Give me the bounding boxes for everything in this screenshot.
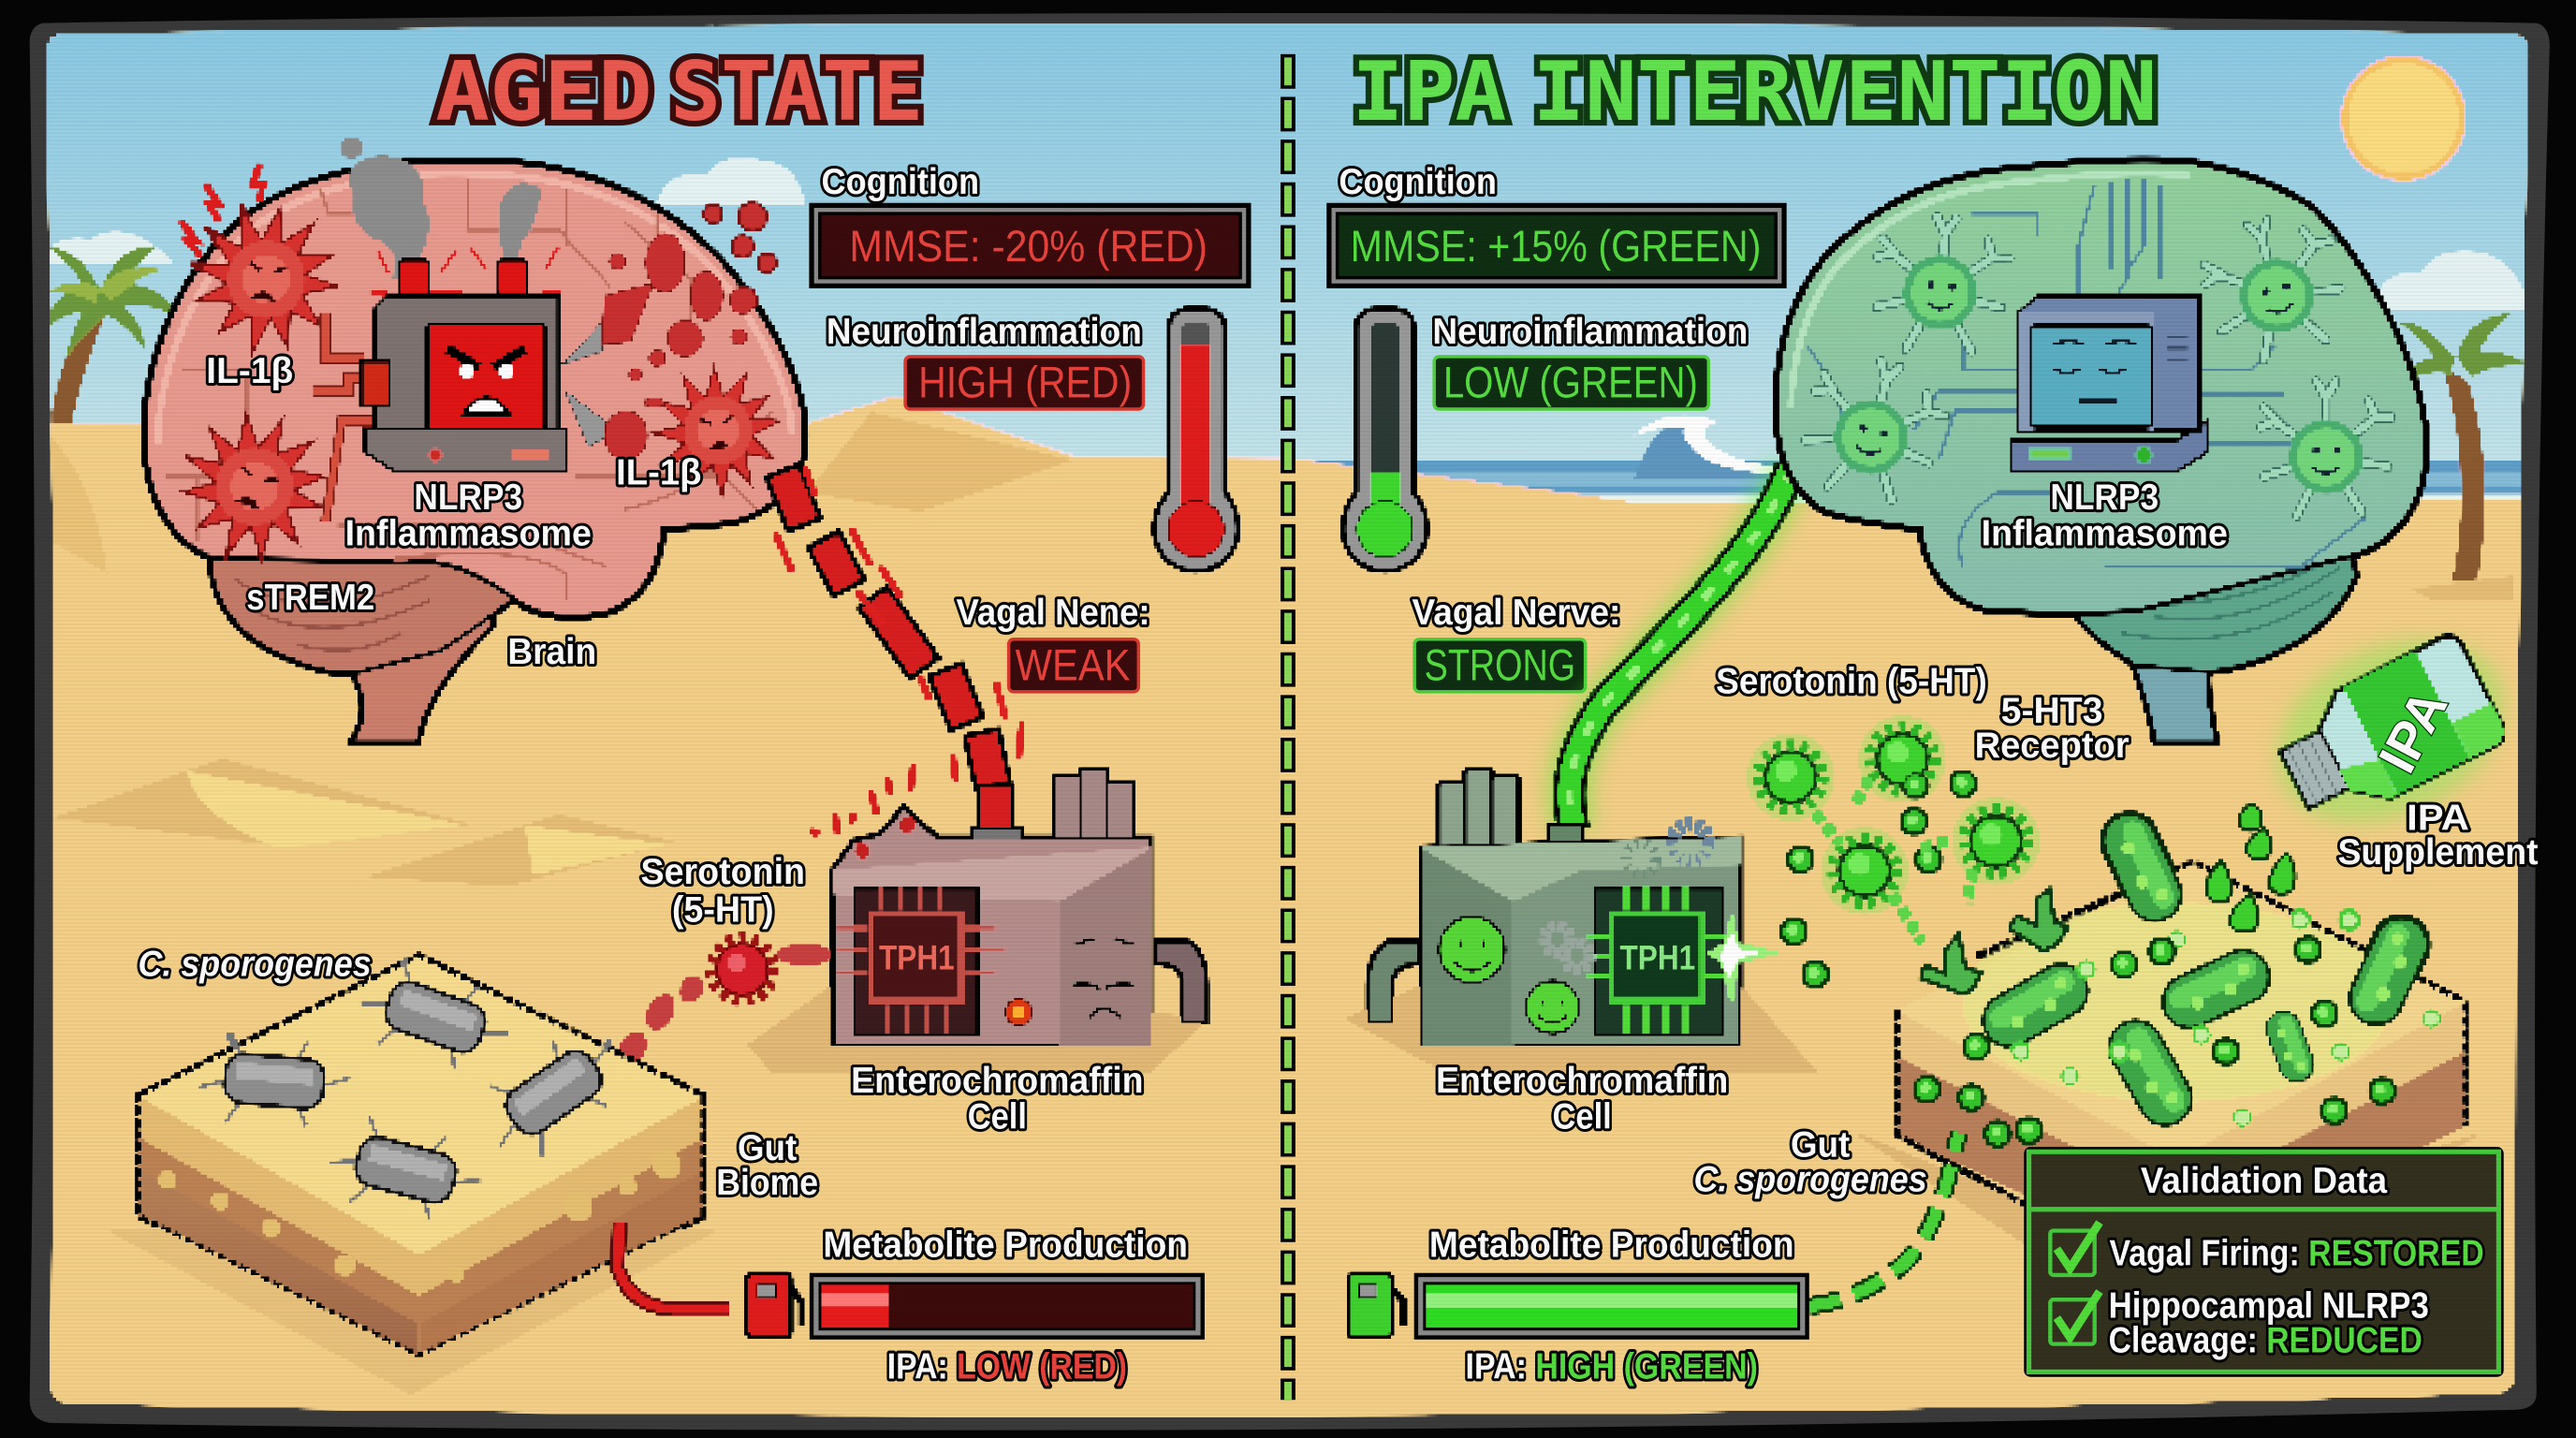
thermometer high: [1155, 309, 1237, 570]
cognition label left: Cognition: [822, 162, 979, 202]
weak red pipe: [618, 1224, 729, 1310]
brainstem: [348, 592, 493, 742]
inflamed cytokine right: [645, 360, 788, 504]
panel: healthy enterochromaffin factory: [1347, 769, 1815, 1071]
nlrp3 machine angry: [361, 259, 567, 472]
label: serotonin left: Serotonin: [641, 852, 805, 892]
title: aged state: STATE: [670, 44, 923, 139]
vagal nerve label: Vagal Nerve:: [1412, 593, 1620, 633]
title: aged state: AGED: [435, 44, 652, 139]
smoke: [342, 138, 542, 283]
label: strem2: sTREM2: [246, 578, 374, 618]
mmse readout green: MMSE: +15% (GREEN): [1351, 222, 1761, 271]
cognition label right: Cognition: [1339, 162, 1497, 202]
serotonin particles: [1748, 716, 2393, 1145]
inflamed cytokine upper: [181, 198, 348, 364]
label: brain: Brain: [507, 632, 596, 672]
label: nlrp3 right: NLRP3: [2050, 477, 2159, 518]
palm tree right: [2395, 312, 2533, 601]
label: enterochromaffin right: Enterochromaffin: [1436, 1061, 1728, 1101]
wires: [313, 312, 378, 522]
panel: healthy brain: [1776, 160, 2425, 742]
cleaving blades and fragments: [562, 204, 775, 460]
strong badge: STRONG: [1425, 641, 1575, 691]
icon: ipa bottle: IPA: [2367, 681, 2458, 782]
low badge: LOW (GREEN): [1443, 359, 1698, 408]
neuroinflammation label left: Neuroinflammation: [827, 312, 1142, 352]
brainstem right: [2126, 644, 2217, 742]
check: vagal firing: [2050, 1223, 2100, 1275]
label: inflammasome: Inflammasome: [345, 514, 592, 554]
cerebellum right: [2069, 542, 2356, 672]
brain artwork left: [144, 138, 805, 742]
label: gut right: Gut: [1791, 1125, 1850, 1166]
sun: [2341, 56, 2466, 181]
mmse readout green: [1329, 205, 1784, 286]
sand and dunes: [37, 396, 2530, 1438]
hippocampal nlrp3 line: Hippocampal NLRP3: [2109, 1286, 2429, 1327]
label: enterochromaffin left: Enterochromaffin: [851, 1061, 1144, 1101]
label: biome: Biome: [716, 1163, 818, 1203]
title: aged state: [435, 44, 923, 139]
label: c. sporogenes right: C. sporogenes: [1693, 1159, 1927, 1199]
calm microglia 2: [2194, 206, 2356, 370]
panel: depleted gut biome block: [110, 951, 714, 1393]
mmse readout red: [812, 205, 1249, 286]
alarm sparks: [181, 165, 562, 292]
label: inflammasome right: Inflammasome: [1982, 514, 2228, 554]
clouds: [41, 158, 2530, 493]
mmse readout red: MMSE: -20% (RED): [849, 222, 1208, 271]
title: ipa intervention: INTERVENTION: [1532, 44, 2157, 139]
ipa drops: [2207, 805, 2294, 931]
label: cell left: Cell: [968, 1097, 1027, 1137]
heading: Validation Data: [2141, 1161, 2388, 1201]
label: supplement: Supplement: [2337, 832, 2539, 873]
label: gut: Gut: [738, 1128, 797, 1168]
metabolite label right: Metabolite Production: [1429, 1225, 1794, 1266]
panel: aged brain: [144, 138, 805, 742]
ipa high label: IPA: HIGH (GREEN): [1466, 1346, 1758, 1387]
palm tree left: [37, 245, 184, 424]
cerebrum: [144, 161, 805, 617]
label: il-1 beta upper: IL-1β: [206, 351, 293, 391]
factory artwork left: [749, 766, 1208, 1071]
metabolite meter low: [812, 1275, 1203, 1338]
neuroinflammation label right: Neuroinflammation: [1432, 312, 1748, 352]
panel: validation data: [2024, 1147, 2504, 1377]
calm microglia 4: [2261, 381, 2392, 516]
check: hippocampal cleavage: [2050, 1291, 2100, 1344]
tph1 label left: TPH1: [879, 938, 955, 976]
vagal firing result: Vagal Firing: RESTORED: [2110, 1233, 2484, 1273]
calm microglia: [1869, 212, 2012, 357]
cerebellum: [211, 550, 522, 674]
green metabolite dashes: [1810, 1134, 1958, 1306]
receptors: [1922, 890, 2067, 992]
thermometer low: [1344, 309, 1426, 570]
label: receptor: Receptor: [1975, 726, 2130, 766]
strong green vagal nerve: [1570, 468, 1791, 829]
label: il-1 beta right: IL-1β: [616, 453, 701, 493]
brain artwork right: [1776, 160, 2425, 742]
central dashed divider: [1284, 54, 1292, 1400]
serotonin particle weak: [614, 938, 831, 1068]
label: ipa supplement title: IPA: [2407, 798, 2469, 838]
panel: damaged enterochromaffin factory: [749, 766, 1208, 1071]
nlrp3 machine calm: [2011, 296, 2208, 472]
vagal nene label: Vagal Nene:: [956, 593, 1150, 633]
calm microglia 3: [1793, 347, 1954, 511]
icon: red fuel pump: [748, 1275, 802, 1336]
metabolite label left: Metabolite Production: [823, 1225, 1188, 1266]
metabolite meter high: [1416, 1275, 1808, 1338]
label: c. sporogenes left: C. sporogenes: [138, 944, 372, 984]
label: nlrp3 inflammasome: NLRP3: [414, 477, 522, 518]
label: serotonin right: Serotonin (5-HT): [1716, 662, 1987, 702]
cleavage reduced line: Cleavage: REDUCED: [2109, 1320, 2422, 1360]
sea and wave: [1288, 416, 2537, 503]
inflamed cytokine lower: [158, 392, 347, 582]
tph1 label right: TPH1: [1620, 938, 1695, 976]
icon: ipa bottle: [2247, 604, 2533, 858]
weak badge: WEAK: [1016, 641, 1131, 691]
title: ipa intervention: IPA: [1352, 44, 1506, 139]
cerebrum right: [1776, 160, 2425, 614]
icon: green fuel pump: [1349, 1275, 1403, 1336]
weak vagal nerve broken: [768, 466, 1022, 833]
high badge: HIGH (RED): [918, 359, 1132, 408]
factory artwork right: [1347, 769, 1815, 1071]
ipa low label: IPA: LOW (RED): [887, 1346, 1127, 1387]
panel: thriving gut biome block: [1856, 806, 2481, 1314]
label: cell right: Cell: [1553, 1097, 1612, 1137]
label: 5-ht left: (5-HT): [672, 890, 774, 931]
label: 5-ht3: 5-HT3: [2001, 691, 2102, 731]
